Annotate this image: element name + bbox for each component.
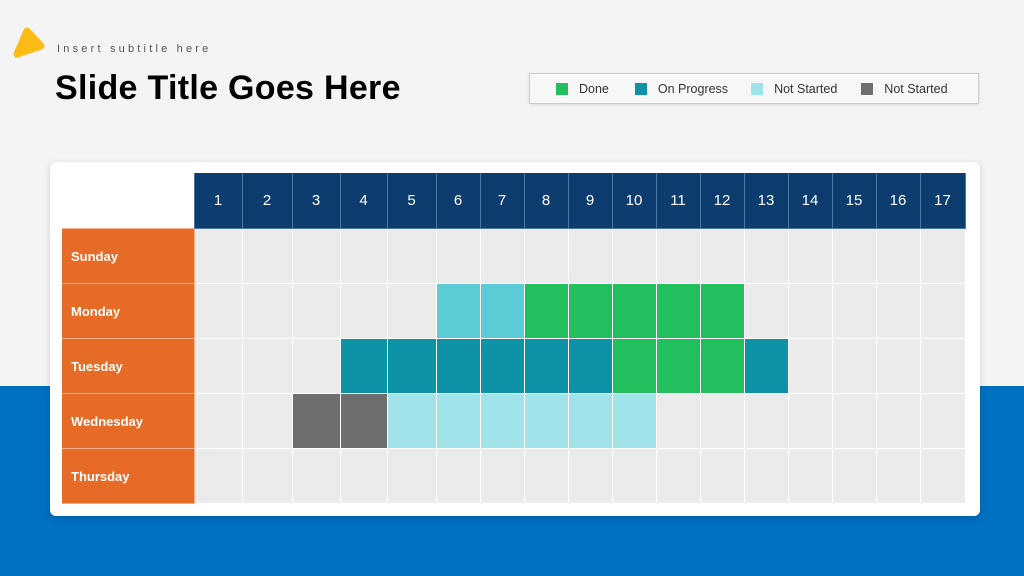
legend: done: [556, 82, 609, 96]
gantt chart table: 14: [802, 192, 818, 209]
gantt chart table: Tuesday: [71, 358, 123, 374]
gantt chart table: Wednesday: [71, 414, 143, 428]
legend: not started gray: Not Started: [884, 82, 948, 96]
gantt chart table: Sunday: [71, 248, 118, 264]
gantt chart table: 16: [890, 192, 906, 209]
gantt chart table: 4: [359, 192, 368, 209]
gantt chart table: 8: [542, 192, 550, 209]
gantt chart table: 3: [312, 192, 320, 209]
legend: on progress: On Progress: [658, 82, 728, 96]
gantt chart table: [62, 173, 966, 504]
subtitle: Insert subtitle here: [57, 43, 212, 55]
blue background band: [0, 386, 1024, 576]
gantt chart table: 17: [934, 192, 951, 209]
gantt chart table: 2: [263, 192, 271, 209]
gantt chart table: 9: [586, 192, 594, 209]
gantt chart table: 7: [498, 192, 506, 209]
panel: schedule card: [50, 162, 980, 516]
gantt chart table: Thursday: [71, 468, 130, 484]
gantt chart table: 12: [714, 192, 730, 209]
gantt chart table: 15: [846, 192, 862, 209]
gantt chart table: 10: [626, 192, 642, 209]
gantt chart table: 6: [454, 192, 462, 209]
gantt chart table: 5: [407, 192, 416, 209]
legend: [529, 73, 979, 104]
legend: not started light: Not Started: [774, 82, 837, 96]
icon: yellow triangle: [14, 28, 44, 58]
title: Slide Title Goes Here: [55, 69, 401, 107]
gantt chart table: 11: [670, 192, 686, 209]
legend: done: Done: [579, 82, 609, 96]
gantt chart table: 13: [758, 192, 774, 209]
gantt chart table: 1: [214, 192, 222, 209]
gantt chart table: Monday: [71, 304, 120, 318]
